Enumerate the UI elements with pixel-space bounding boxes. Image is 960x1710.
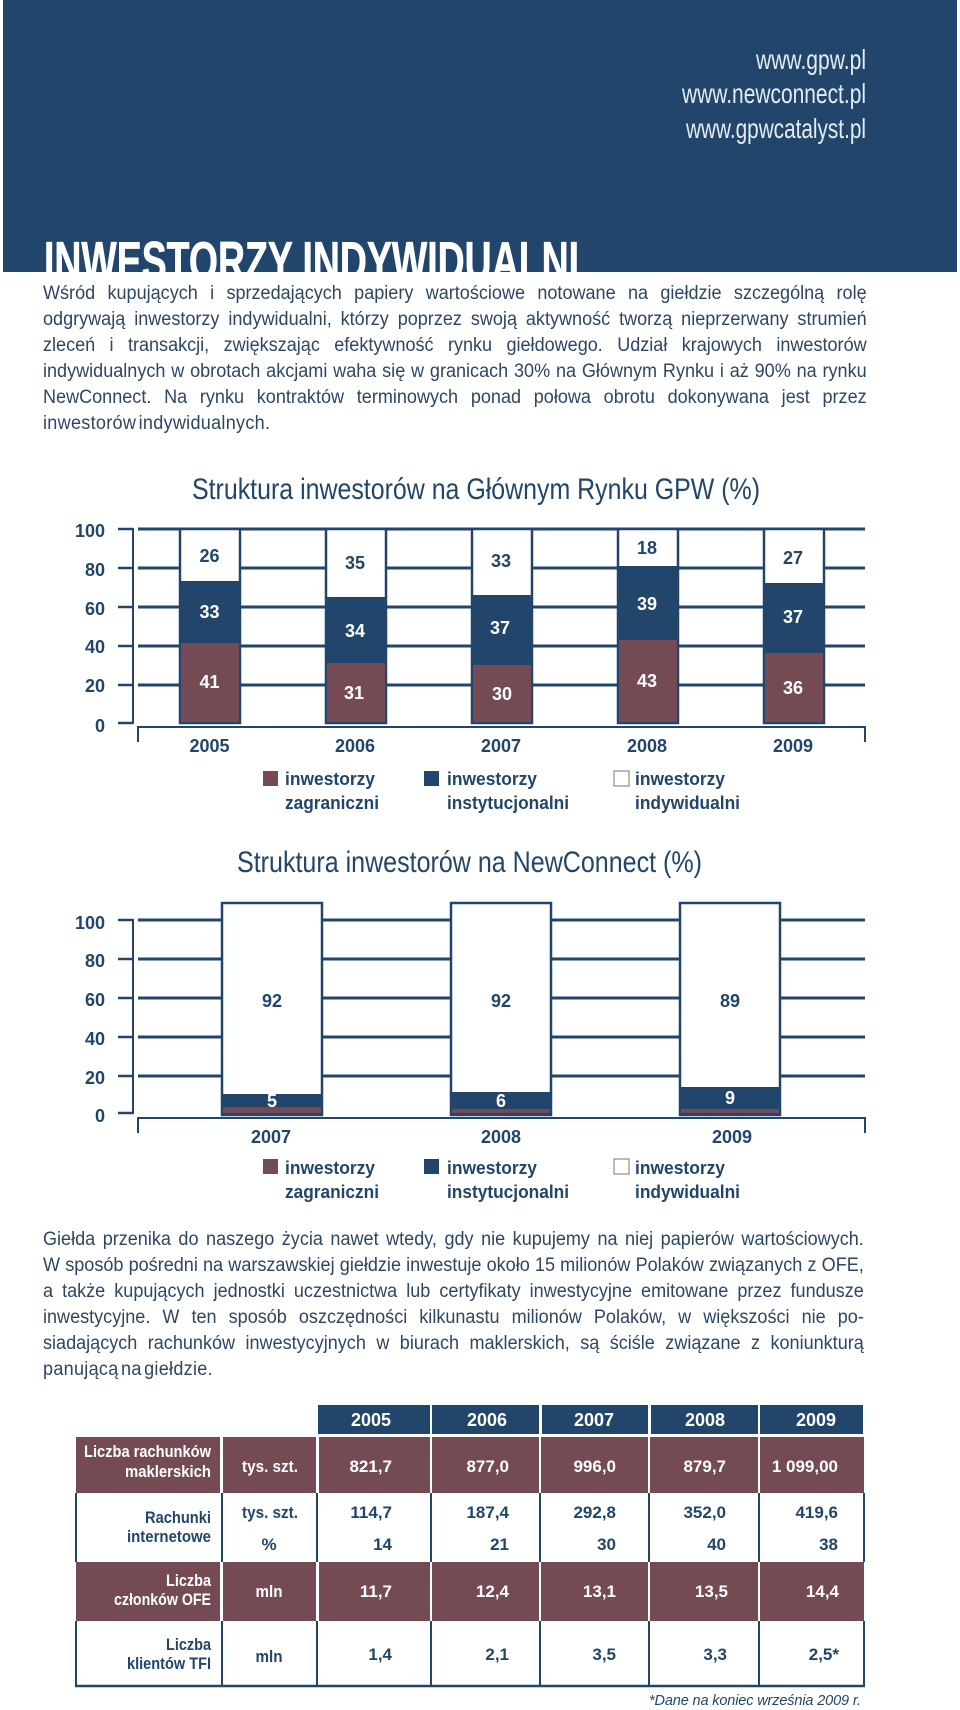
legend: instytucjonalni: [447, 793, 569, 813]
table row: rachunki internetowe: 292,8: [573, 1503, 616, 1522]
intro paragraph: Wśród kupujących i sprzedających papiery wartościowe notowane na giełdzie szczególną rolę: [43, 283, 867, 304]
table row: rachunki internetowe: 38: [819, 1535, 838, 1554]
table year header: 2009: [796, 1410, 836, 1430]
table row: OFE: 13,1: [583, 1582, 616, 1601]
bar 2007: 37: [490, 618, 510, 638]
bar 2007: 92: [262, 991, 282, 1011]
bar 2005: 41: [199, 672, 220, 692]
y axis: 100: [75, 913, 105, 933]
intro paragraph: inwestorów indywidualnych.: [43, 413, 270, 434]
table year header: 2006: [467, 1410, 507, 1430]
bar 2009: 89: [720, 991, 740, 1011]
table row: rachunki internetowe: 187,4: [466, 1503, 510, 1522]
bar 2005: 33: [199, 602, 220, 622]
bar 2005: [179, 529, 241, 723]
x axis with years: 2005: [189, 736, 230, 756]
table row: rachunki internetowe: internetowe: [127, 1527, 211, 1546]
second paragraph: Giełda przenika do naszego życia nawet wtedy, gdy nie kupujemy na niej papierów wartościowych.: [43, 1229, 864, 1250]
website links: www.newconnect.pl: [681, 78, 866, 109]
table row: TFI: 3,5: [592, 1645, 616, 1664]
bar 2009: 36: [783, 678, 803, 698]
bar 2009: [763, 529, 825, 723]
y axis: 60: [85, 599, 105, 619]
bar 2005: 26: [199, 546, 220, 566]
table row: rachunki internetowe: 419,6: [795, 1503, 838, 1522]
table row: rachunki internetowe: 30: [597, 1535, 616, 1554]
second paragraph: inwestycyjne. W ten sposób oszczędności kilkunastu milionów Polaków, w większości nie po-: [43, 1307, 864, 1328]
second paragraph: [43, 1229, 864, 1380]
y axis: 40: [85, 637, 105, 657]
table year header: 2008: [685, 1410, 725, 1430]
table year header: [318, 1405, 863, 1434]
table row: TFI: 2,1: [485, 1645, 509, 1664]
bar 2009: 27: [783, 548, 803, 568]
table year header: 2007: [574, 1410, 614, 1430]
legend: inwestorzy: [635, 1158, 725, 1178]
y axis: 60: [85, 990, 105, 1010]
intro paragraph: [43, 283, 867, 434]
bar 2008: [450, 903, 552, 1116]
table row: rachunki internetowe: 21: [490, 1535, 509, 1554]
y axis: 100: [75, 521, 105, 541]
x axis with years: 2009: [773, 736, 813, 756]
bar 2007: 30: [492, 684, 512, 704]
chart title: Struktura inwestorów na Głównym Rynku GPW (%): [192, 473, 760, 506]
table row: rachunki internetowe: %: [261, 1535, 277, 1554]
intro paragraph: indywidualnych w obrotach akcjami waha się w granicach 30% na Głównym Rynku i aż 90% na rynku: [43, 361, 867, 382]
website links: www.gpwcatalyst.pl: [685, 113, 866, 144]
table row: rachunki internetowe: [76, 1493, 864, 1562]
table row: OFE: 12,4: [476, 1582, 510, 1601]
table row: TFI: 3,3: [703, 1645, 727, 1664]
legend: [263, 769, 740, 813]
x axis with years: 2008: [627, 736, 667, 756]
bar 2006: 35: [345, 553, 365, 573]
legend: inwestorzy: [635, 769, 725, 789]
table row: rachunki maklerskie: Liczba rachunków: [84, 1442, 212, 1461]
bar 2008: [617, 529, 679, 723]
x axis with years: [138, 1118, 865, 1147]
table row: rachunki internetowe: 14: [373, 1535, 393, 1554]
x axis with years: 2008: [481, 1127, 521, 1147]
table row: TFI: klientów TFI: [127, 1654, 211, 1673]
bar 2007: [471, 529, 533, 723]
table row: OFE: 14,4: [806, 1582, 840, 1601]
bar 2006: [325, 529, 387, 723]
y axis: 80: [85, 560, 105, 580]
y axis: [75, 521, 133, 736]
data table: [75, 1405, 865, 1709]
table row: TFI: Liczba: [166, 1635, 211, 1654]
y axis: 0: [95, 716, 105, 736]
table row: rachunki maklerskie: 821,7: [349, 1457, 392, 1476]
y axis: 80: [85, 951, 105, 971]
table row: TFI: 2,5*: [809, 1645, 839, 1664]
legend: indywidualni: [635, 1182, 740, 1202]
table year header: 2005: [351, 1410, 391, 1430]
bar 2007: 5: [267, 1091, 277, 1111]
legend: zagraniczni: [285, 793, 379, 813]
intro paragraph: NewConnect. Na rynku kontraktów terminowych ponad połowa obrotu dokonywana jest przez: [43, 387, 867, 408]
table row: OFE: 11,7: [360, 1582, 392, 1601]
table row: OFE: Liczba: [166, 1571, 211, 1590]
legend: inwestorzy: [447, 1158, 537, 1178]
table row: rachunki maklerskie: tys. szt.: [242, 1457, 298, 1476]
intro paragraph: odgrywają inwestorzy indywidualni, którzy poprzez swoją aktywność tworzą nieprzerwany strumień: [43, 309, 867, 330]
table row: rachunki maklerskie: 879,7: [683, 1457, 726, 1476]
bar 2006: 31: [344, 683, 364, 703]
bar 2009: [679, 903, 781, 1116]
chart 2: NewConnect: [75, 846, 866, 1202]
bar 2007: [221, 903, 323, 1116]
table row: rachunki maklerskie: 877,0: [466, 1457, 509, 1476]
bar 2006: 34: [345, 621, 365, 641]
legend: zagraniczni: [285, 1182, 379, 1202]
table row: TFI: [75, 1621, 865, 1686]
table row: rachunki maklerskie: 1 099,00: [772, 1457, 838, 1476]
y axis: [75, 913, 133, 1126]
x axis with years: 2009: [712, 1127, 752, 1147]
x axis with years: 2006: [335, 736, 375, 756]
table row: OFE: członków OFE: [114, 1590, 211, 1609]
chart title: Struktura inwestorów na NewConnect (%): [237, 846, 702, 879]
bar 2008: 92: [491, 991, 511, 1011]
legend: inwestorzy: [447, 769, 537, 789]
second paragraph: W sposób pośredni na warszawskiej giełdzie inwestuje około 15 milionów Polaków związanych z OFE,: [43, 1255, 864, 1276]
chart 1: Główny Rynek GPW: [75, 473, 866, 813]
x axis with years: 2007: [251, 1127, 291, 1147]
legend: instytucjonalni: [447, 1182, 569, 1202]
table row: OFE: [76, 1562, 864, 1621]
bar 2008: 6: [496, 1091, 506, 1111]
bar 2008: 43: [637, 671, 657, 691]
legend: inwestorzy: [285, 1158, 375, 1178]
table row: rachunki internetowe: Rachunki: [145, 1508, 211, 1527]
intro paragraph: zleceń i transakcji, zwiększając efektywność rynku giełdowego. Udział krajowych inwestorów: [43, 335, 867, 356]
second paragraph: a także kupujących jednostki uczestnictwa lub certyfikaty inwestycyjne emitowane przez fundusze: [43, 1281, 864, 1302]
x axis with years: [138, 727, 865, 756]
x axis with years: 2007: [481, 736, 521, 756]
legend: [263, 1158, 740, 1202]
y axis: 20: [85, 676, 105, 696]
website links: [681, 44, 866, 144]
table row: rachunki internetowe: tys. szt.: [242, 1503, 298, 1522]
table row: rachunki maklerskie: maklerskich: [125, 1462, 211, 1481]
bar 2009: 37: [783, 607, 803, 627]
table row: rachunki maklerskie: [76, 1437, 864, 1493]
table row: TFI: mln: [256, 1647, 282, 1666]
footnote: *Dane na koniec września 2009 r.: [649, 1693, 861, 1709]
table row: TFI: 1,4: [368, 1645, 393, 1664]
bar 2007: 33: [491, 551, 511, 571]
table row: rachunki internetowe: 114,7: [350, 1503, 392, 1522]
table row: OFE: mln: [256, 1582, 282, 1601]
table row: rachunki internetowe: 40: [707, 1535, 726, 1554]
legend: inwestorzy: [285, 769, 375, 789]
y axis: 40: [85, 1029, 105, 1049]
legend: indywidualni: [635, 793, 740, 813]
second paragraph: panującą na giełdzie.: [43, 1359, 213, 1380]
y axis: 0: [95, 1106, 105, 1126]
y axis: 20: [85, 1068, 105, 1088]
table row: rachunki internetowe: 352,0: [683, 1503, 726, 1522]
second paragraph: siadających rachunków inwestycyjnych w biurach maklerskich, są ściśle związane z koniunkturą: [43, 1333, 864, 1354]
bar 2008: 18: [637, 538, 657, 558]
table row: OFE: 13,5: [695, 1582, 728, 1601]
table row: rachunki maklerskie: 996,0: [573, 1457, 616, 1476]
bar 2008: 39: [637, 594, 657, 614]
header banner: [3, 0, 957, 272]
bar 2009: 9: [725, 1088, 735, 1108]
website links: www.gpw.pl: [755, 44, 866, 75]
